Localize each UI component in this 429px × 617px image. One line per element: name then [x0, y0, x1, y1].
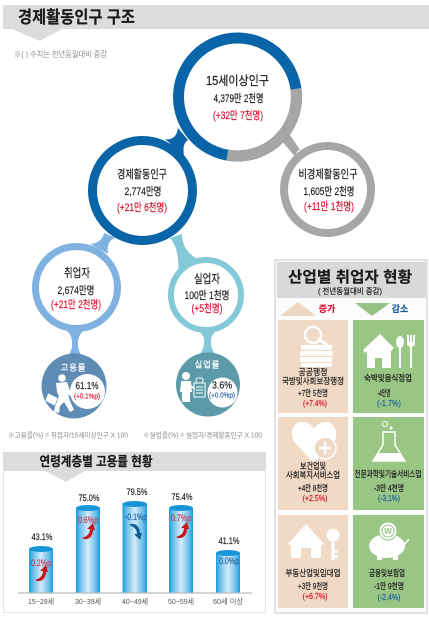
card: accommodation and food: -4만명 — [378, 388, 390, 398]
card: health and social welfare: (+2.5%) — [302, 494, 328, 503]
industry panel heading — [277, 262, 426, 298]
card: accommodation and food: 숙박및음식점업 — [364, 373, 412, 383]
circle: economically active population: 2,774만명 — [124, 185, 162, 198]
card: professional and scientific services: (-3.1%) — [378, 494, 400, 503]
bar changes: 0.2%p — [31, 558, 51, 568]
connector necks between circles — [66, 128, 300, 358]
age panel heading: 연령계층별 고용률 현황 — [40, 454, 153, 469]
title banner — [3, 5, 429, 41]
circle: employed — [36, 246, 118, 328]
age axis labels: 50~59세 — [168, 597, 194, 606]
badge: employment rate: 61.1% — [76, 381, 99, 392]
age axis labels: 40~49세 — [122, 597, 148, 606]
footnotes: rate formulas — [8, 430, 262, 440]
bar changes: 0.6%p — [78, 515, 98, 525]
industry panel heading: 산업별 취업자 현황 — [288, 269, 412, 286]
badge: unemployment rate: 실업률 — [194, 360, 220, 370]
card: public administration — [278, 320, 348, 413]
title banner: 경제활동인구 구조 — [18, 8, 135, 27]
card: finance and insurance — [353, 515, 424, 608]
circle: unemployed — [171, 260, 241, 330]
decrease marker — [355, 303, 408, 316]
card: public administration: 공공행정 — [298, 367, 328, 377]
circle: economically inactive population: 비경제활동인구 — [298, 167, 358, 181]
footnotes: rate formulas: ※고용률(%) = 취업자/15세이상인구 X 100 — [8, 430, 128, 440]
card: health and social welfare — [278, 417, 348, 510]
icon: house and key — [288, 524, 340, 560]
industry panel heading: ( 전년동월대비 증감) — [318, 286, 382, 296]
increase marker: 증가 — [319, 303, 336, 314]
card: finance and insurance: -1만 9천명 — [374, 581, 404, 591]
card: real estate: +3만 9천명 — [298, 581, 328, 591]
card: health and social welfare: 사회복지서비스업 — [286, 470, 340, 480]
circle: unemployed: 실업자 — [194, 272, 220, 286]
circle: population aged 15 and over: (+32만 7천명) — [213, 108, 263, 122]
note: parentheses meaning: ※( ) 수치는 전년동월대비 증감 — [14, 49, 108, 59]
circle: economically active population: 경제활동인구 — [117, 167, 167, 181]
circle: population aged 15 and over — [178, 38, 296, 156]
increase marker — [280, 302, 336, 316]
icon: job seeker with clipboard — [180, 372, 205, 402]
card: real estate — [278, 515, 348, 608]
icon: heart with plus — [292, 422, 336, 463]
panel: employment by industry — [275, 260, 427, 613]
bar values: 75.0% — [78, 493, 100, 504]
card: health and social welfare: 보건업및 — [300, 461, 326, 471]
footnotes: rate formulas: ※실업률(%) = 실업자/경제활동인구 X 100 — [143, 430, 262, 440]
card: accommodation and food: (-1.7%) — [377, 399, 401, 408]
card: accommodation and food — [353, 320, 424, 413]
badge: employment rate: (+0.1%p) — [74, 394, 100, 400]
circle: unemployed: (+5천명) — [192, 301, 222, 315]
bar values: 75.4% — [172, 492, 193, 503]
card: public administration: +7만 5천명 — [298, 388, 328, 398]
bar changes: 0.0%p — [219, 556, 239, 566]
card: real estate: 부동산업및임대업 — [286, 568, 340, 578]
circle: economically active population: (+21만 6천명) — [117, 200, 167, 214]
circle: economically inactive population: (+11만 1천명) — [304, 199, 354, 213]
card: finance and insurance: (-2.4%) — [378, 593, 401, 602]
card: professional and scientific services: -3만 4천명 — [374, 483, 404, 493]
icon: running businessman — [45, 374, 74, 413]
bar chart — [18, 487, 252, 606]
circle: population aged 15 and over: 4,379만 2천명 — [214, 91, 264, 105]
bar values: 79.5% — [126, 487, 148, 498]
circle: employed: (+21만 2천명) — [51, 297, 101, 311]
badge: employment rate: 고용률 — [60, 362, 86, 372]
card: public administration: (+7.4%) — [303, 399, 327, 408]
bar values — [32, 487, 240, 547]
bar values: 43.1% — [32, 532, 53, 543]
badge: unemployment rate — [176, 352, 240, 416]
circle: employed: 취업자 — [64, 266, 90, 280]
circle: population aged 15 and over: 15세이상인구 — [206, 74, 269, 88]
bar values: 41.1% — [218, 536, 240, 547]
panel: employment rate by age group — [3, 452, 266, 612]
card: real estate: (+6.7%) — [302, 592, 328, 601]
circle: economically active population — [92, 140, 192, 240]
change arrows — [35, 522, 189, 581]
bar changes: 0.7%p — [171, 513, 191, 523]
circle: economically inactive population: 1,605만 2천명 — [304, 184, 354, 198]
card: health and social welfare: +4만 8천명 — [298, 483, 328, 493]
circle: economically inactive population — [284, 146, 371, 233]
icon: lab flask — [373, 422, 405, 461]
card: public administration: 국방및사회보장행정 — [282, 376, 344, 386]
badge: employment rate — [42, 354, 106, 418]
icon: house with spoon and fork — [363, 334, 415, 368]
card: finance and insurance: 금융및보험업 — [369, 568, 405, 578]
decrease marker: 감소 — [392, 303, 408, 314]
circle: employed: 2,674만명 — [58, 284, 94, 297]
icon: books and magnifier — [300, 327, 333, 367]
badge: unemployment rate: (+0.0%p) — [209, 392, 235, 400]
icon: piggy bank with won coin: W — [384, 527, 392, 536]
circle: unemployed: 100만 1천명 — [184, 288, 230, 302]
age axis labels: 15~29세 — [28, 597, 54, 606]
age axis labels: 30~39세 — [75, 597, 101, 606]
bar changes: -0.1%p — [125, 512, 147, 522]
badge: unemployment rate: 3.6% — [212, 380, 232, 392]
bar changes — [31, 512, 239, 568]
age panel heading — [3, 452, 266, 482]
card: professional and scientific services — [353, 417, 424, 510]
age axis labels — [28, 596, 243, 606]
age axis labels: 60세 이상 — [213, 596, 243, 606]
